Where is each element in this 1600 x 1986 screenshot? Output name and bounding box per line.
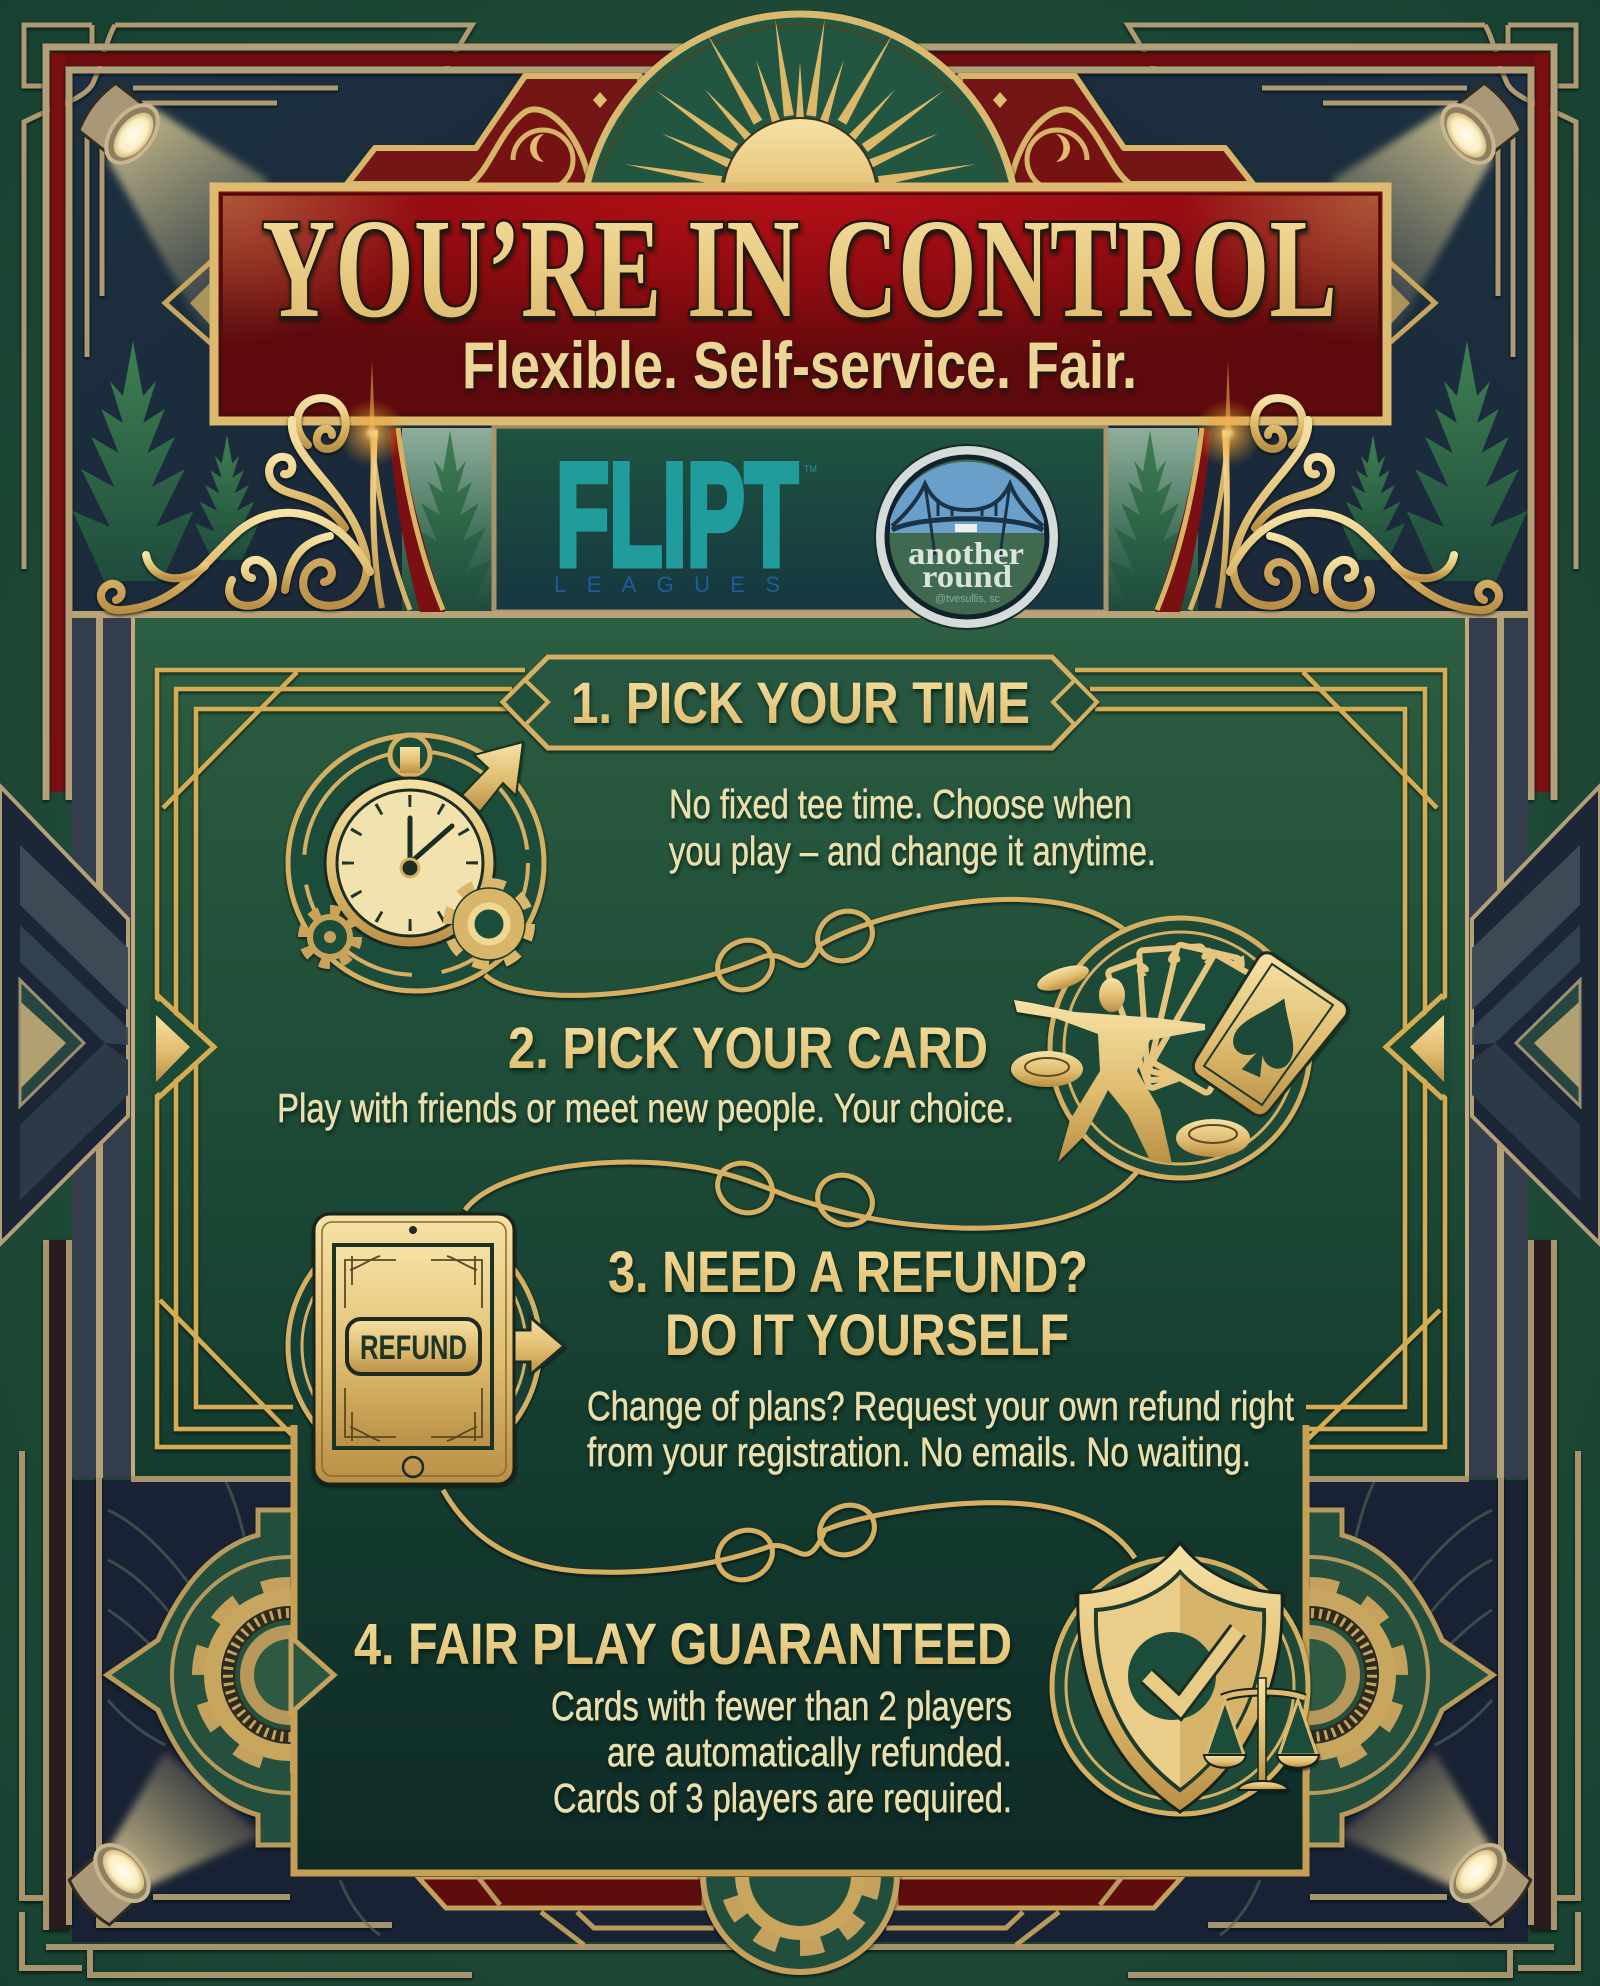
step 4 text: Cards with fewer than 2 players	[551, 1683, 1012, 1729]
right arch stripes	[1155, 428, 1227, 612]
frame side chevron right	[1386, 995, 1450, 1099]
step 3 heading: 3. NEED A REFUND?	[608, 1240, 1088, 1305]
ornament: left wing above banner	[347, 76, 640, 190]
right gold swirl	[1218, 398, 1499, 610]
banner	[212, 185, 1389, 423]
left gold swirl	[101, 398, 382, 610]
step 4 text	[551, 1683, 1012, 1821]
bottom line under header	[72, 611, 1528, 618]
logo: another round badge	[875, 445, 1059, 629]
step 1 text	[669, 781, 1156, 874]
sunburst arch	[582, 14, 1018, 450]
step 1 heading badge	[503, 657, 1097, 748]
logo: another round badge: another	[908, 535, 1024, 571]
left trees	[73, 341, 259, 581]
gear emblem right	[1192, 1510, 1493, 1845]
banner side diamond right	[1385, 258, 1435, 347]
frame side chevron left	[150, 995, 214, 1099]
gear emblem left	[107, 1510, 408, 1845]
logo: another round badge: round	[922, 558, 1012, 594]
step 2 heading: 2. PICK YOUR CARD	[508, 1016, 988, 1081]
step 3 text: from your registration. No emails. No waiting.	[587, 1429, 1251, 1475]
step 3 heading: DO IT YOURSELF	[665, 1303, 1069, 1368]
glow left	[338, 360, 406, 490]
top frame, right half	[788, 25, 1576, 800]
logo: another round badge: @tvesullis, sc	[935, 593, 1000, 605]
left window with tree	[402, 428, 492, 612]
step 3 text	[587, 1383, 1294, 1475]
gold frame	[157, 670, 1445, 1447]
connector 3	[443, 1490, 1135, 1589]
bottom gear	[703, 1778, 897, 1972]
logo: FLIPT Leagues	[554, 433, 817, 597]
right window with tree	[1108, 428, 1198, 612]
step 2 text: Play with friends or meet new people. Your choice.	[277, 1085, 1014, 1131]
emblem tip over panel	[291, 1637, 334, 1713]
icon: shield with check and scales	[1052, 1543, 1319, 1814]
left arch stripes	[373, 428, 445, 612]
lower navy backdrop	[72, 1480, 1528, 1942]
lamp beam top right	[1332, 106, 1492, 340]
step 1 heading: 1. PICK YOUR TIME	[571, 671, 1030, 736]
glow right	[1194, 360, 1262, 490]
step 1 text: you play – and change it anytime.	[669, 828, 1156, 874]
lower frame lines	[22, 1240, 1578, 1975]
ornament: right wing above banner	[960, 76, 1253, 190]
side stripes, left	[72, 618, 138, 1478]
side panel left	[0, 786, 128, 1244]
spotlight top right	[1432, 78, 1527, 172]
step 4 text: are automatically refunded.	[607, 1729, 1012, 1775]
lamp beam bottom left	[105, 1752, 262, 1890]
step 3 heading	[608, 1240, 1088, 1368]
icon: cards and disc thrower	[1011, 918, 1347, 1178]
connector 1	[485, 899, 1125, 999]
banner side diamond left	[165, 258, 215, 347]
icon: stopwatch with gears	[288, 735, 544, 991]
right trees	[1341, 341, 1527, 581]
connector 2	[465, 1154, 1137, 1234]
step 4 heading: 4. FAIR PLAY GUARANTEED	[354, 1612, 1012, 1677]
panel bottom edge	[131, 1476, 1469, 1482]
logo band	[494, 426, 1106, 612]
logo: FLIPT Leagues: TM	[804, 464, 817, 474]
logo: FLIPT Leagues: LEAGUES	[554, 572, 780, 597]
bottom red ribbon	[418, 1877, 1182, 1945]
main panel	[135, 618, 1465, 1478]
subtitle: Flexible. Self-service. Fair.	[462, 328, 1137, 402]
side stripes, right	[1462, 618, 1528, 1478]
step 1 text: No fixed tee time. Choose when	[669, 781, 1132, 827]
refund label: REFUND	[360, 1329, 467, 1367]
side panel right	[1472, 786, 1600, 1244]
lamp beam top left	[108, 106, 268, 340]
step 3 text: Change of plans? Request your own refund right	[587, 1383, 1294, 1429]
top frame, left half	[24, 25, 812, 800]
lower panel	[293, 1398, 1306, 1877]
lamp beam bottom right	[1338, 1752, 1495, 1890]
logo: FLIPT Leagues: FLIPT	[556, 433, 798, 596]
spotlight bottom left	[64, 1835, 159, 1930]
step 4 text: Cards of 3 players are required.	[553, 1775, 1012, 1821]
icon: tablet with refund button	[288, 1214, 564, 1484]
spotlight bottom right	[1441, 1835, 1536, 1930]
faint sunburst arcs	[108, 1480, 1492, 1935]
spotlight top left	[73, 78, 168, 172]
